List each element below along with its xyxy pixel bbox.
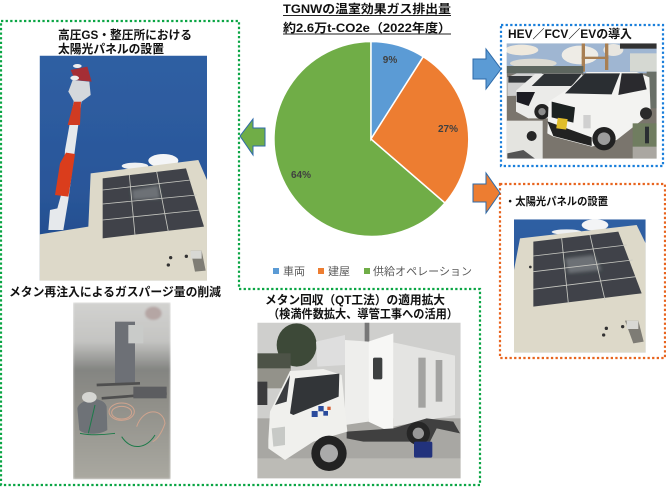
inset left bbox=[507, 121, 543, 159]
heading: solar panels at pressure stations: 太陽光パネルの設置 bbox=[58, 41, 164, 56]
far car bbox=[507, 73, 542, 96]
arrow: orange to buildings bbox=[473, 173, 500, 213]
legend: 車両 bbox=[283, 264, 305, 278]
heading: methane recovery bbox=[265, 292, 458, 321]
heading: methane recovery: メタン回収（QT工法）の適用拡大 bbox=[265, 292, 445, 307]
data labels bbox=[291, 55, 458, 181]
arrow: blue to vehicles bbox=[473, 49, 501, 89]
heading: methane recovery: （検満件数拡大、導管工事への活用） bbox=[268, 306, 458, 321]
panel: blue dotted frame for vehicles bbox=[501, 25, 663, 166]
slice: buildings 27% bbox=[371, 57, 469, 203]
heading: solar panels at pressure stations bbox=[58, 27, 192, 56]
pie chart bbox=[274, 41, 469, 236]
photo: tower and solar panels bbox=[40, 56, 207, 281]
cab bbox=[268, 369, 347, 460]
panel: green dotted frame for supply operations bbox=[1, 21, 480, 485]
data labels: 27% bbox=[438, 124, 458, 135]
building bbox=[40, 160, 207, 281]
photo: methane re-injection equipment bbox=[73, 302, 171, 479]
photo: solar panels on building bbox=[514, 219, 646, 353]
heading: solar panels at pressure stations: 高圧GS・整圧所における bbox=[58, 27, 192, 42]
truck box bbox=[316, 335, 345, 367]
middle car bbox=[516, 74, 585, 118]
chart title: TGNWの温室効果ガス排出量 bbox=[283, 1, 451, 16]
chart title bbox=[283, 1, 451, 35]
legend: 供給オペレーション bbox=[373, 264, 472, 278]
heading: solar panels: ・太陽光パネルの設置 bbox=[505, 194, 608, 208]
heading: methane re-injection: メタン再注入によるガスパージ量の削減 bbox=[9, 284, 221, 299]
front car bbox=[547, 72, 651, 147]
slice: vehicles 9% bbox=[371, 41, 423, 139]
chart title: 約2.6万t-CO2e（2022年度） bbox=[283, 20, 451, 35]
undercarriage bbox=[347, 418, 460, 442]
arrow: green to supply operations bbox=[240, 119, 265, 155]
inset right bbox=[632, 123, 657, 147]
legend bbox=[273, 264, 472, 278]
slice: supply operations 64% bbox=[274, 42, 445, 236]
photo: electric vehicles bbox=[505, 43, 657, 159]
tower bbox=[48, 100, 82, 230]
data labels: 64% bbox=[291, 170, 311, 181]
panel: orange dotted frame for buildings bbox=[500, 184, 665, 358]
heading: HEV FCV EV: HEV／FCV／EVの導入 bbox=[508, 26, 632, 41]
data labels: 9% bbox=[383, 55, 397, 66]
photo: methane recovery truck bbox=[257, 323, 461, 478]
legend: 建屋 bbox=[328, 265, 350, 278]
